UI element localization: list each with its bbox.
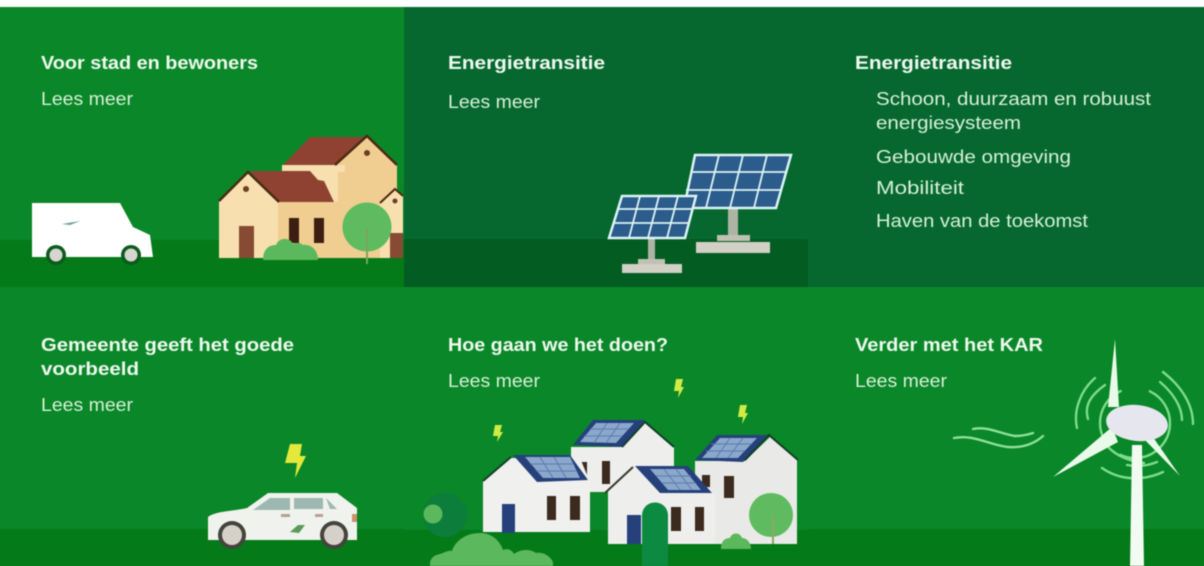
panel: Energietransitie zonnepanelen [404, 7, 808, 287]
panel: Voor stad en bewoners [0, 7, 404, 287]
panel: Hoe gaan we het doen? [404, 287, 808, 566]
heading: Energietransitie: Energietransitie [855, 53, 1012, 73]
panel: Gemeente geeft het goede voorbeeld [0, 287, 404, 566]
heading: Gemeente geeft het goede voorbeeld: Gemeente geeft het goede [41, 335, 294, 355]
icon: rear solar panel [684, 155, 791, 253]
sound waves [1076, 372, 1193, 478]
heading: Gemeente geeft het goede voorbeeld: voorbeeld [41, 359, 139, 379]
link: Lees meer: Lees meer [41, 89, 133, 109]
list of topics: energiesysteem [876, 113, 1021, 133]
heading: Energietransitie: Energietransitie [448, 53, 605, 73]
link: Lees meer: Lees meer [448, 371, 540, 391]
middle back house [571, 420, 674, 492]
tree right [749, 493, 793, 544]
icon: white van [32, 203, 153, 265]
list of topics: Haven van de toekomst [876, 211, 1088, 231]
heading: Voor stad en bewoners: Voor stad en bewoners [41, 53, 258, 73]
bush right [721, 534, 751, 549]
icon: white electric car [208, 493, 357, 549]
icon: wind turbine [1053, 339, 1193, 566]
list of topics: Mobiliteit [876, 178, 964, 198]
icon: houses with red roofs [219, 136, 403, 264]
hub [1104, 402, 1170, 444]
link: Lees meer: Lees meer [448, 92, 540, 112]
front house [605, 466, 715, 544]
icons: small lightning bolts [493, 379, 748, 442]
right house [695, 435, 798, 544]
heading: Hoe gaan we het doen?: Hoe gaan we het doen? [448, 335, 668, 355]
blades [1108, 339, 1119, 407]
heading: Verder met het KAR: Verder met het KAR [855, 335, 1043, 355]
icon: trees and bushes left [423, 493, 553, 566]
panel: Verder met het KAR [808, 287, 1204, 566]
list of topics: Gebouwde omgeving [876, 147, 1071, 167]
link: Lees meer: Lees meer [855, 371, 947, 391]
heading: Gemeente geeft het goede voorbeeld [41, 335, 294, 379]
icon: lightning bolt [285, 444, 306, 478]
link: Lees meer: Lees meer [41, 395, 133, 415]
icon: front solar panel [609, 196, 696, 273]
list of topics [876, 89, 1151, 231]
panel: Energietransitie lijst [808, 7, 1204, 287]
left house [483, 455, 590, 533]
icon: wind lines [954, 428, 1043, 447]
tree in front [642, 502, 668, 566]
icon: houses with solar roofs [483, 420, 798, 566]
list of topics: Schoon, duurzaam en robuust [876, 89, 1151, 109]
tower [1130, 445, 1144, 566]
